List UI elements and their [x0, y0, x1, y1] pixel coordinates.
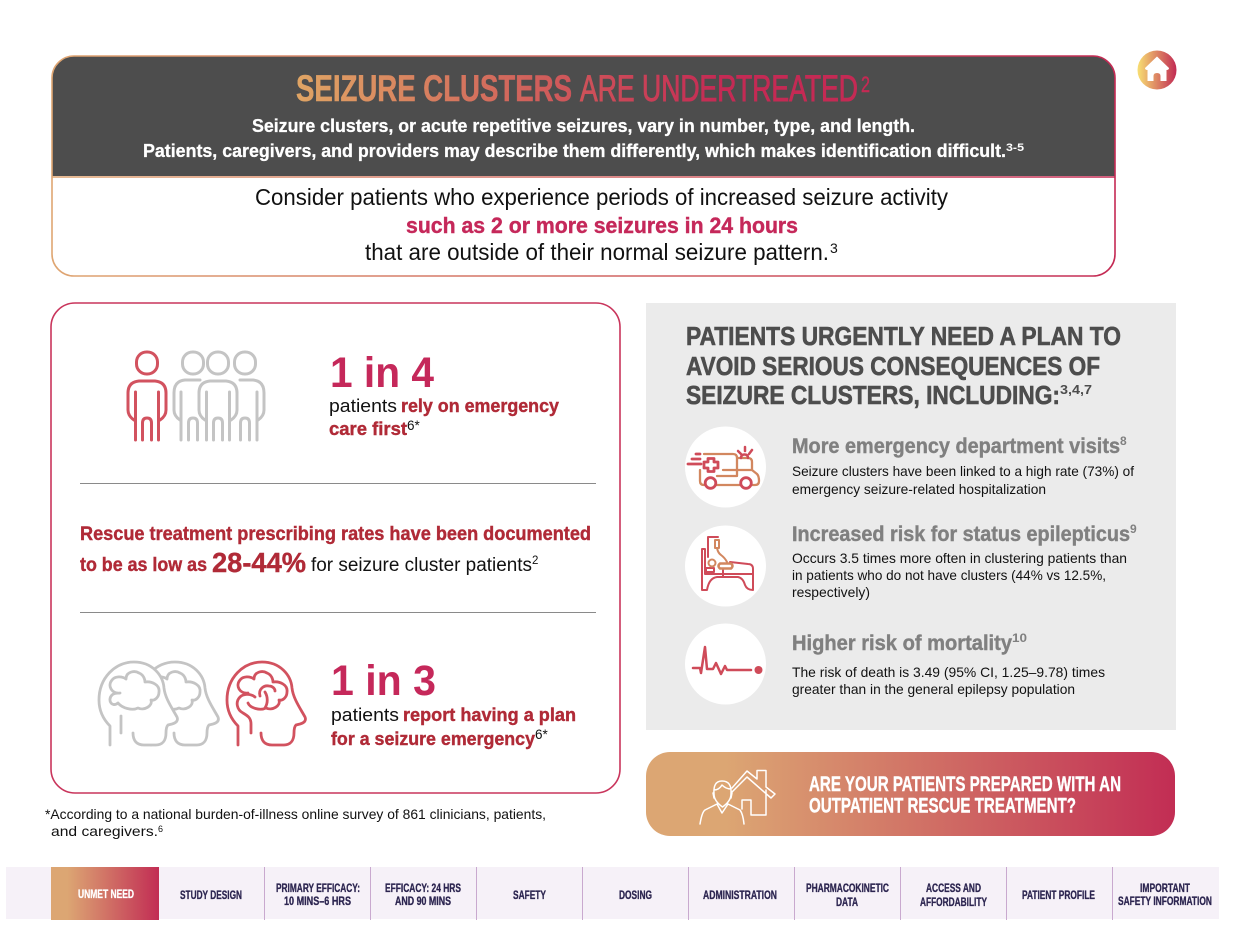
tab labels: AFFORDABILITY: [920, 897, 987, 909]
title: ARE UNDERTREATED: [580, 68, 858, 109]
icon: ambulance: [685, 426, 766, 508]
panel heading: SEIZURE CLUSTERS, INCLUDING:: [686, 382, 1060, 410]
tab labels: DATA: [836, 897, 858, 909]
tab labels: PATIENT PROFILE: [1022, 890, 1095, 902]
panel: seizure clusters header box: [52, 56, 1115, 276]
stat: 1 in 4: 1 in 4: [330, 349, 434, 397]
icon: hospital bed: [685, 526, 766, 606]
callout: outpatient rescue treatment: [646, 752, 1175, 836]
callout text: ARE YOUR PATIENTS PREPARED WITH AN: [809, 773, 1121, 796]
tab labels: PRIMARY EFFICACY:: [276, 883, 360, 895]
icon: three heads with brains, one highlighted: [99, 662, 305, 745]
stat: 1 in 4: rely on emergency: [401, 395, 560, 416]
subsection: status epilepticus: respectively): [792, 584, 870, 600]
header description: Patients, caregivers, and providers may describe them differently, which makes identification difficult.: [143, 140, 1006, 161]
subsection: emergency visits: 8: [1120, 434, 1127, 448]
stat: 1 in 4: care first: [329, 418, 407, 439]
tab labels: ADMINISTRATION: [703, 890, 777, 902]
title: 2: [861, 72, 870, 97]
tab labels: STUDY DESIGN: [180, 890, 242, 902]
stat: 1 in 3: report having a plan: [403, 704, 576, 725]
stat: prescribing rates: Rescue treatment prescribing rates have been documented: [80, 524, 591, 545]
header description: 3-5: [1006, 142, 1024, 154]
footnote: 6: [158, 824, 163, 834]
stat: 1 in 4: 6*: [407, 418, 421, 433]
title: [296, 68, 870, 109]
subsection: emergency visits: [792, 434, 1134, 497]
stat: 1 in 4: [329, 349, 560, 439]
header description: Seizure clusters, or acute repetitive seizures, vary in number, type, and length.: [252, 115, 915, 136]
consider patients statement: 3: [830, 240, 838, 256]
subsection: mortality: [792, 631, 1105, 697]
icon: heart monitor line: [685, 624, 766, 704]
subsection: mortality: greater than in the general epilepsy population: [792, 681, 1075, 697]
panel: serious consequences: [646, 303, 1176, 730]
header description: [143, 115, 1024, 161]
subsection: status epilepticus: Occurs 3.5 times more often in clustering patients than: [792, 550, 1127, 566]
panel heading: 3,4,7: [1060, 382, 1092, 397]
consider patients statement: [255, 184, 948, 265]
callout text: OUTPATIENT RESCUE TREATMENT?: [809, 794, 1076, 818]
tab labels: [180, 883, 1212, 909]
stat: prescribing rates: 2: [532, 555, 538, 567]
tab labels: IMPORTANT: [1140, 883, 1190, 895]
callout text: [809, 773, 1121, 818]
consider patients statement: such as 2 or more seizures in 24 hours: [406, 213, 798, 238]
tab labels: 10 MINS–6 HRS: [284, 896, 351, 908]
navigation bar: [6, 867, 1219, 920]
stat: 1 in 4: patients: [329, 395, 397, 416]
footnote: [45, 806, 546, 839]
subsection: emergency visits: Seizure clusters have been linked to a high rate (73%) of: [792, 463, 1134, 479]
subsection: mortality: The risk of death is 3.49 (95% CI, 1.25–9.78) times: [792, 664, 1105, 680]
subsection: mortality: Higher risk of mortality: [792, 632, 1012, 655]
panel heading: [686, 323, 1121, 410]
stat: 1 in 3: 6*: [535, 727, 549, 742]
stat: prescribing rates: for seizure cluster patients: [311, 555, 532, 576]
stat: 1 in 3: for a seizure emergency: [331, 728, 536, 749]
stat: prescribing rates: to be as low as: [80, 555, 207, 576]
tab labels: ACCESS AND: [926, 883, 981, 895]
tab labels: SAFETY INFORMATION: [1118, 896, 1212, 908]
footnote: *According to a national burden-of-illness online survey of 861 clinicians, patients,: [45, 806, 546, 822]
stat: 1 in 3: 1 in 3: [331, 657, 436, 705]
stat: prescribing rates: [80, 524, 591, 578]
tab labels: EFFICACY: 24 HRS: [385, 883, 461, 895]
icon: home button: [1138, 50, 1176, 90]
stat: 1 in 3: patients: [331, 704, 399, 725]
subsection: status epilepticus: Increased risk for status epilepticus: [792, 523, 1130, 546]
subsection: mortality: 10: [1012, 631, 1027, 645]
panel: statistics: [51, 303, 620, 793]
subsection: status epilepticus: 9: [1130, 522, 1137, 536]
active tab: unmet need: UNMET NEED: [78, 889, 134, 901]
stat: prescribing rates: 28-44%: [212, 547, 306, 578]
consider patients statement: that are outside of their normal seizure pattern.: [365, 239, 829, 265]
icon: person and house: [700, 770, 775, 824]
tab labels: SAFETY: [513, 890, 546, 902]
subsection: emergency visits: More emergency department visits: [792, 435, 1120, 458]
subsection: emergency visits: emergency seizure-related hospitalization: [792, 481, 1046, 497]
tab labels: DOSING: [619, 890, 652, 902]
footnote: and caregivers.: [51, 823, 158, 839]
subsection: status epilepticus: in patients who do not have clusters (44% vs 12.5%,: [792, 567, 1106, 583]
consider patients statement: Consider patients who experience periods of increased seizure activity: [255, 184, 948, 210]
tab labels: AND 90 MINS: [395, 896, 451, 908]
active tab: unmet need: [51, 867, 159, 920]
panel heading: PATIENTS URGENTLY NEED A PLAN TO: [686, 323, 1121, 351]
icon: four people, one highlighted: [128, 352, 264, 440]
subsection: status epilepticus: [792, 522, 1137, 600]
title: SEIZURE CLUSTERS: [296, 68, 572, 109]
tab labels: PHARMACOKINETIC: [806, 883, 889, 895]
panel heading: AVOID SERIOUS CONSEQUENCES OF: [686, 353, 1100, 381]
stat: 1 in 3: [331, 657, 576, 749]
